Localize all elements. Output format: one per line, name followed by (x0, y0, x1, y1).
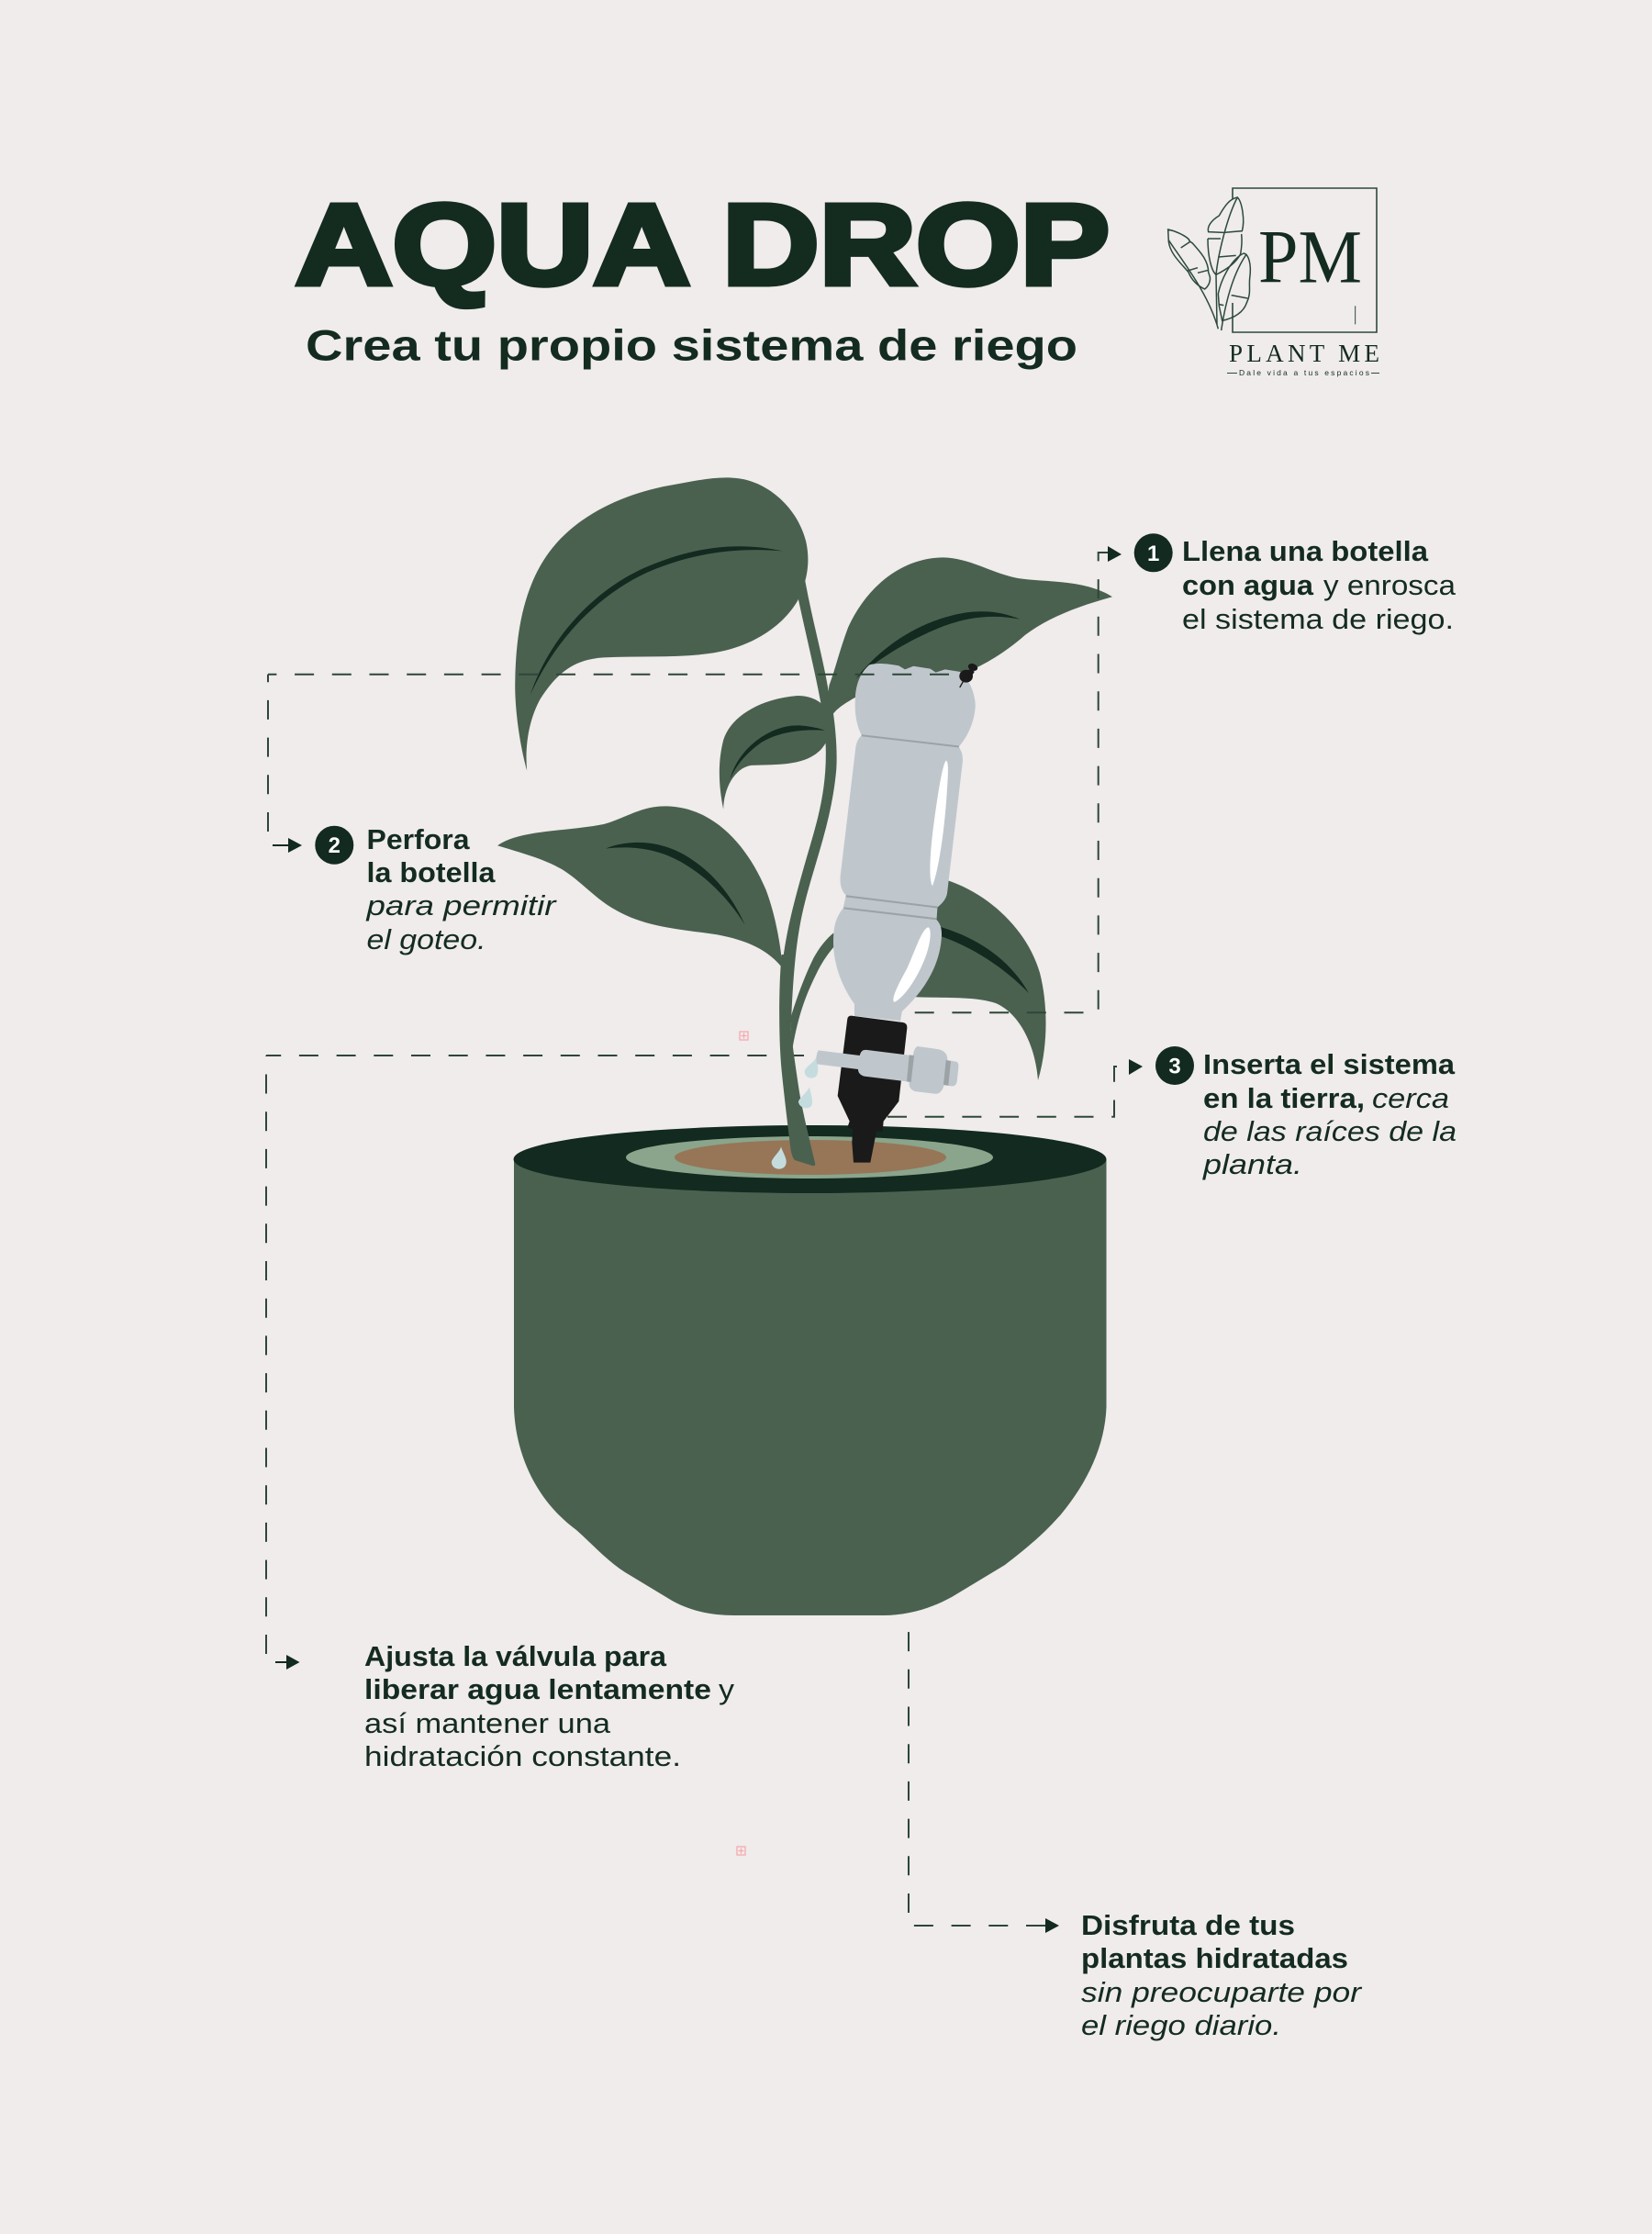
valve bands (907, 1055, 951, 1086)
bottle highlight lower (893, 927, 931, 1002)
step 1 text: el sistema de riego. (1182, 603, 1454, 635)
step 5 text: Disfruta de tus (1081, 1909, 1295, 1941)
logo leaves (1168, 197, 1356, 330)
leaf vein: lower right (941, 927, 1029, 993)
leaf vein: top left (530, 546, 783, 695)
leaf vein: small middle (731, 725, 825, 779)
step 3 text (1202, 1048, 1457, 1180)
arrow: step 5 (1045, 1918, 1059, 1933)
water drop 1 (805, 1057, 818, 1078)
step 3 text: en la tierra, (1203, 1082, 1365, 1114)
plastic bottle (833, 662, 979, 1021)
valve head (910, 1046, 947, 1094)
step 3 (1155, 1046, 1457, 1180)
number badge 3: 3 (1168, 1054, 1181, 1079)
dashed connector: step 3 (887, 1067, 1117, 1117)
step 5 text: plantas hidratadas (1081, 1942, 1348, 1974)
title: AQUA DROP (296, 182, 1110, 308)
leaf: small middle (720, 696, 833, 810)
water drop 2 (798, 1087, 812, 1108)
number badge 1 (1134, 533, 1173, 572)
step 1 text (1182, 535, 1457, 635)
leaf: top left (515, 477, 808, 771)
logo frame (1233, 188, 1377, 332)
irrigation device and stem base (772, 933, 907, 1169)
dashed connector: step 5 (909, 1632, 1045, 1926)
step 3 text: planta. (1202, 1148, 1302, 1180)
leaf: lower right (909, 880, 1046, 1080)
step 4 text: Ajusta la válvula para (364, 1640, 667, 1672)
step 2 text: Perfora (367, 823, 470, 855)
step 3 text: de las raíces de la (1203, 1115, 1457, 1147)
step 4 text: liberar agua lentamente (364, 1673, 711, 1705)
stem: lower (779, 955, 815, 1166)
step 5 text: sin preocuparte por (1081, 1976, 1363, 2008)
small marker upper (740, 1032, 748, 1040)
number badge 2 (315, 826, 353, 865)
small marker lower (737, 1847, 745, 1855)
leaf: top right (829, 557, 1112, 714)
step 5 text: el riego diario. (1081, 2009, 1281, 2041)
dashed connector: step 2 (268, 675, 949, 832)
bottle highlight upper (930, 761, 948, 886)
arrow: step 3 (1129, 1059, 1143, 1075)
upper plant in zoom coordinates (497, 477, 1112, 1046)
subtitle: Crea tu propio sistema de riego (306, 321, 1077, 369)
dashed connector: step 4 (266, 1056, 804, 1654)
step 4 text: y (719, 1673, 735, 1705)
step 2 text (365, 823, 557, 955)
number badge 1: 1 (1147, 542, 1159, 566)
step 2 (315, 823, 557, 955)
pot body (514, 1159, 1107, 1615)
leaf vein: top right (855, 611, 1020, 679)
stem: upper (780, 581, 837, 1046)
icon: push pin (959, 662, 979, 687)
pot rim (514, 1125, 1107, 1193)
step 2 text: la botella (367, 856, 496, 888)
pot (514, 1125, 1107, 1615)
valve pipe (816, 1050, 911, 1081)
step 2 text: para permitir (365, 889, 557, 922)
step 2 text: el goteo. (367, 923, 486, 955)
arrow: step 1 (1108, 546, 1122, 562)
leaf: left (497, 806, 783, 968)
valve (816, 1046, 958, 1094)
soil (675, 1140, 946, 1175)
step 4 text: así mantener una (364, 1707, 611, 1739)
step 1 text: con agua (1182, 569, 1314, 601)
leaf vein: left (606, 843, 745, 924)
logo name: PLANT ME (1229, 340, 1379, 367)
number badge 3 (1155, 1046, 1194, 1085)
logo tagline: Dale vida a tus espacios (1239, 368, 1369, 377)
bottle body (833, 664, 976, 1021)
step 1 (1134, 533, 1457, 635)
stem: branch (790, 933, 838, 1049)
water drop 3 (772, 1146, 787, 1169)
bottle ridges (843, 735, 959, 919)
step 3 text: cerca (1372, 1082, 1449, 1114)
number badge 2: 2 (329, 833, 340, 858)
step 4 text (364, 1640, 735, 1772)
step 3 text: Inserta el sistema (1203, 1048, 1456, 1080)
valve end cap (943, 1060, 958, 1086)
logo monogram: PM (1258, 215, 1362, 299)
pot inner ring (626, 1136, 993, 1178)
plant (497, 477, 1112, 1080)
black dripper spike (838, 1016, 907, 1163)
step 4 text: hidratación constante. (364, 1740, 681, 1772)
step 1 text: y enrosca (1323, 569, 1457, 601)
logo: Plant Me (1168, 188, 1379, 377)
arrow: step 2 (273, 838, 302, 853)
dashed connector: step 1 (915, 553, 1109, 1012)
step 5 text (1081, 1909, 1363, 2041)
step 1 text: Llena una botella (1182, 535, 1429, 567)
arrow: step 4 (275, 1655, 299, 1670)
